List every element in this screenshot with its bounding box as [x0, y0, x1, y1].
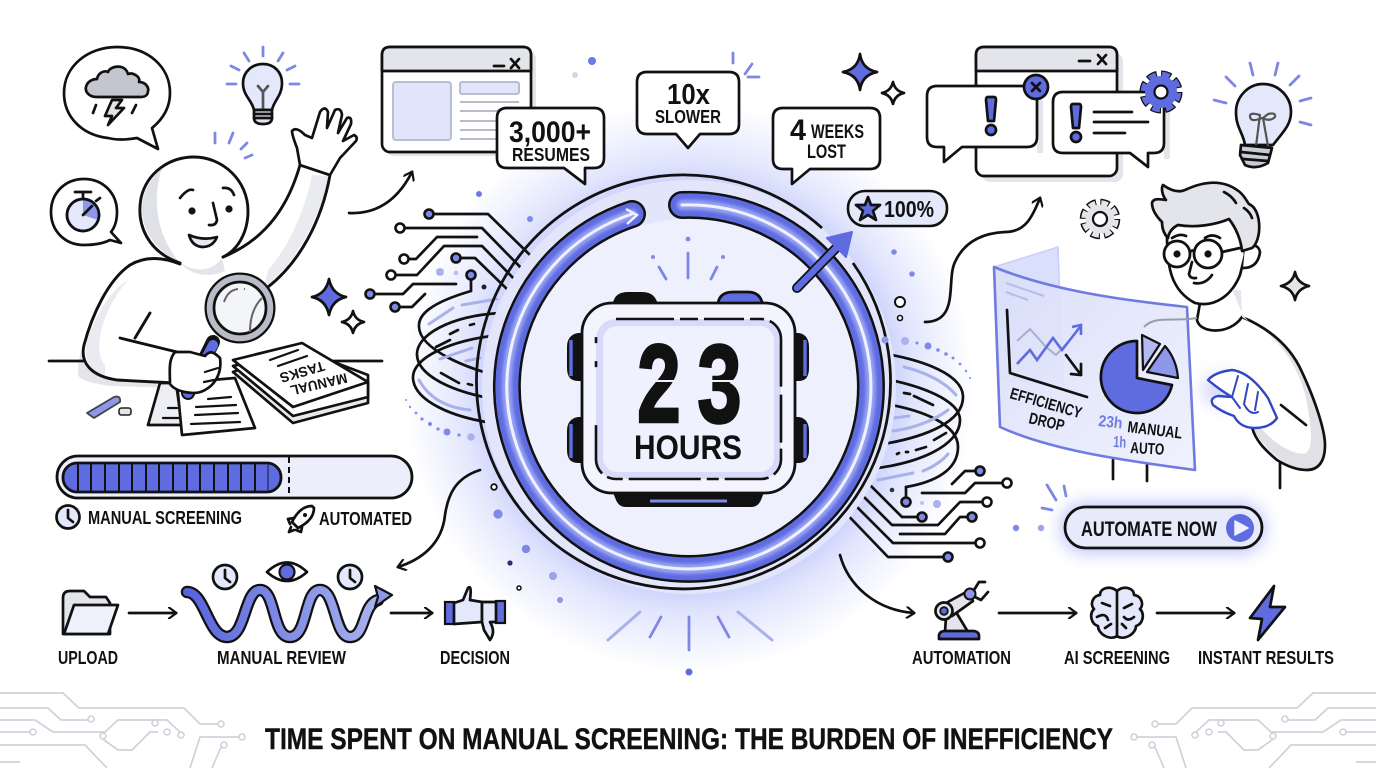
stat bubble: 4 weeks lost: WEEKS	[811, 122, 864, 143]
icon: gray gear	[1084, 203, 1116, 235]
torso	[1197, 317, 1325, 480]
person left	[49, 108, 382, 435]
pinching hand	[1202, 370, 1277, 428]
bubble: stopwatch	[51, 179, 121, 245]
stat bubble: 3,000+ resumes	[497, 108, 604, 184]
face	[1167, 215, 1245, 304]
spiral right	[860, 297, 971, 487]
footer circuit pattern right	[1131, 693, 1376, 768]
central glow	[404, 102, 974, 672]
sparkles top right	[843, 54, 904, 104]
icon: light bulb left	[227, 47, 299, 124]
time value 23: 23	[635, 325, 743, 457]
scattered dots	[476, 57, 1044, 603]
watch buttons	[567, 292, 809, 507]
pill: 100%	[848, 191, 947, 226]
flow left: decision thumbs: DECISION	[440, 648, 510, 668]
holographic panel: EFFICIENCY	[1008, 386, 1084, 422]
button: automate now	[1060, 502, 1266, 554]
arrow	[999, 612, 1076, 614]
magnifier	[206, 274, 274, 342]
button: automate now: AUTOMATE NOW	[1081, 518, 1217, 541]
back paper	[148, 383, 182, 425]
alert bubble 2	[1053, 75, 1178, 167]
arrow	[391, 612, 432, 614]
flow left: upload folder	[58, 591, 118, 668]
stat bubble: 4 weeks lost: LOST	[807, 142, 846, 163]
holographic panel: DROP	[1027, 410, 1066, 435]
circuit traces left	[366, 210, 530, 312]
thought rays	[215, 133, 252, 158]
curved arrow into flow	[398, 470, 480, 567]
sparks by 10x	[733, 53, 759, 77]
top sparks	[651, 237, 725, 279]
flow left: manual review wave	[187, 562, 392, 668]
legs of display	[1113, 460, 1147, 481]
flow right: AI screening brain	[1064, 588, 1170, 668]
legend: manual screening: MANUAL SCREENING	[88, 508, 242, 528]
holographic panel	[994, 247, 1197, 470]
magnifier handle	[188, 342, 213, 393]
holographic panel: AUTO	[1130, 440, 1165, 459]
stat bubble: 10x slower: SLOWER	[655, 107, 721, 127]
window right with alerts	[927, 47, 1178, 182]
flow right: instant results bolt	[1198, 586, 1334, 668]
pen and eraser	[87, 397, 120, 418]
title: TIME SPENT ON MANUAL SCREENING: THE BURDEN OF INEFFICIENCY	[265, 723, 1113, 756]
arrow	[129, 612, 176, 614]
watch screen	[596, 319, 781, 479]
holographic panel: 1h	[1113, 434, 1127, 452]
fist	[170, 352, 220, 393]
arm and body	[83, 165, 330, 384]
legend: automated	[288, 506, 412, 532]
hair	[1152, 183, 1259, 251]
curved arrow to window right	[925, 198, 1040, 322]
manual tasks stack: TASKS	[278, 358, 327, 386]
arrow	[1157, 612, 1234, 614]
sparkles left	[312, 279, 364, 333]
front paper	[177, 378, 255, 435]
sparkle gray	[1281, 272, 1309, 300]
circuit traces right	[838, 466, 1012, 562]
inner disc	[521, 219, 857, 555]
glasses	[1164, 240, 1240, 268]
manual tasks stack: MANUAL	[288, 370, 349, 399]
hours label: HOURS	[634, 429, 742, 467]
stat bubble: 4 weeks lost	[773, 108, 880, 184]
progress band	[507, 205, 871, 569]
bubble: storm cloud thought	[64, 47, 170, 149]
stat bubble: 4 weeks lost: 4	[790, 114, 806, 147]
raised hand	[292, 108, 357, 175]
icon: light bulb right	[1214, 63, 1311, 167]
progress bar	[57, 456, 412, 498]
flow left: decision thumbs	[440, 587, 510, 668]
icon: blue gear	[1144, 75, 1178, 109]
sparks by button	[1042, 485, 1066, 510]
desk line	[49, 360, 382, 362]
legend: automated: AUTOMATED	[319, 509, 412, 529]
outer ring outline	[477, 175, 891, 589]
left arrow to window	[349, 172, 412, 213]
central ring timer	[477, 175, 896, 594]
ear	[1243, 245, 1260, 268]
pill: 100%: 100%	[884, 196, 934, 222]
holographic panel: 23h	[1098, 413, 1123, 432]
flow right: automation robot	[912, 582, 1011, 668]
flow right: instant results bolt: INSTANT RESULTS	[1198, 648, 1334, 668]
spiral left	[405, 291, 500, 441]
stat bubble: 10x slower	[637, 72, 739, 148]
legend: manual screening	[56, 506, 242, 528]
manual tasks stack	[233, 343, 368, 423]
holographic panel: MANUAL	[1127, 419, 1183, 443]
flow right: automation robot: AUTOMATION	[912, 648, 1011, 668]
curved arrow to automation	[840, 555, 914, 613]
stat bubble: 3,000+ resumes: RESUMES	[512, 145, 590, 165]
watch body	[582, 303, 795, 493]
flow left: manual review wave: MANUAL REVIEW	[217, 648, 346, 668]
flow left: upload folder: UPLOAD	[58, 648, 118, 668]
footer circuit pattern left	[0, 693, 245, 768]
stat bubble: 10x slower: 10x	[667, 79, 710, 111]
person right	[994, 183, 1325, 488]
bottom burst rays	[608, 612, 772, 676]
upward arrow	[797, 232, 852, 288]
band arrowhead	[626, 209, 637, 224]
flow right: AI screening brain: AI SCREENING	[1064, 648, 1170, 668]
window left	[382, 47, 536, 156]
stat bubble: 3,000+ resumes: 3,000+	[509, 116, 591, 149]
head	[140, 157, 248, 265]
pie chart	[1101, 335, 1178, 413]
alert bubble 1	[927, 75, 1048, 162]
